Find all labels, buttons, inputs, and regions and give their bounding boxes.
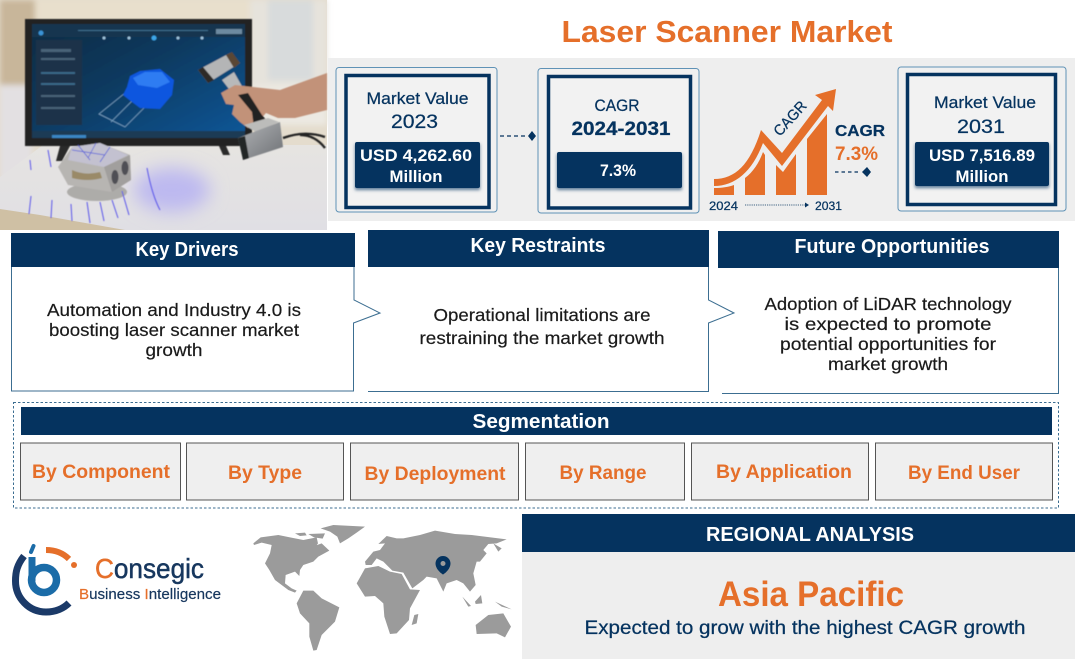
segment: by type: By Type <box>228 462 302 484</box>
panel: regional analysis: Expected to grow with the highest CAGR growth <box>584 618 1026 639</box>
card: CAGR 2024-2031: 7.3% <box>600 161 636 180</box>
card: market value 2023: Market Value <box>366 89 468 108</box>
connector arrow 1 <box>500 131 536 141</box>
segment: by type <box>186 443 344 500</box>
photo: handheld laser scanner and monitor <box>0 0 327 230</box>
card: CAGR 2024-2031: 2024-2031 <box>572 119 671 140</box>
segmentation heading: Segmentation <box>472 411 610 433</box>
segment: by deployment: By Deployment <box>364 463 506 485</box>
chart: CAGR growth arrow: CAGR <box>835 123 885 140</box>
card: market value 2031: USD 7,516.89 <box>929 146 1035 165</box>
blue laser lines <box>29 150 160 223</box>
panel: regional analysis: Asia Pacific <box>718 575 904 614</box>
chart: CAGR growth arrow: 2024 <box>709 199 738 213</box>
panel: key drivers: growth <box>146 340 202 360</box>
card: market value 2031: 2031 <box>957 117 1005 138</box>
panel: key restraints: Key Restraints <box>470 235 606 257</box>
logo: Consegic Business Intelligence: Business Intelligence <box>79 586 221 603</box>
panel: regional analysis <box>522 514 1075 659</box>
segment: by application <box>692 443 868 500</box>
segment: by deployment <box>350 443 518 500</box>
segment: by range <box>526 443 684 500</box>
card: CAGR 2024-2031: CAGR <box>594 96 640 115</box>
panel: market statistics band <box>328 58 1075 221</box>
segment: by end user: By End User <box>908 462 1020 484</box>
segment: by component: By Component <box>32 461 170 483</box>
chart: CAGR growth arrow: 2031 <box>815 199 842 213</box>
card: market value 2023: Million <box>390 167 442 186</box>
card: market value 2031 <box>898 67 1066 211</box>
segment: by end user <box>876 443 1052 500</box>
card: CAGR 2024-2031 <box>538 68 699 213</box>
panel: key drivers: Automation and Industry 4.0 is <box>47 300 301 320</box>
panel: future opportunities: is expected to promote <box>784 314 992 334</box>
panel: key drivers <box>11 233 380 391</box>
scanner and hand <box>198 53 240 83</box>
card: market value 2023 <box>336 68 497 212</box>
segmentation heading <box>21 407 1052 435</box>
panel: regional analysis: REGIONAL ANALYSIS <box>706 523 914 546</box>
logo: Consegic Business Intelligence <box>16 546 221 612</box>
chart: CAGR growth arrow <box>709 89 885 213</box>
panel: key restraints: Operational limitations are <box>434 305 650 325</box>
panel: future opportunities: Future Opportunities <box>794 236 990 258</box>
card: market value 2031: Million <box>956 167 1008 186</box>
segment: by component <box>20 443 180 500</box>
segment: by application: By Application <box>716 461 852 483</box>
blue scan model <box>99 93 147 127</box>
map: world map with Asia pin <box>253 525 512 651</box>
logo: Consegic Business Intelligence: Consegic <box>95 553 204 584</box>
chart: CAGR growth arrow: CAGR <box>770 98 811 140</box>
panel: key drivers: Key Drivers <box>136 239 238 261</box>
panel: key restraints <box>368 230 734 392</box>
panel: key restraints: restraining the market growth <box>420 328 664 348</box>
panel: future opportunities: market growth <box>828 354 948 374</box>
panel: key drivers: boosting laser scanner market <box>49 320 299 340</box>
panel: future opportunities: Adoption of LiDAR technology <box>764 294 1012 314</box>
panel: segmentation <box>14 402 1058 508</box>
title: Laser Scanner Market <box>562 14 892 49</box>
card: market value 2031: Market Value <box>934 93 1036 112</box>
segment: by range: By Range <box>560 462 647 484</box>
panel: future opportunities <box>718 231 1059 394</box>
card: market value 2023: 2023 <box>391 112 438 133</box>
physical part on table <box>67 183 127 201</box>
chart: CAGR growth arrow: 7.3% <box>835 144 878 165</box>
monitor <box>25 19 252 146</box>
card: market value 2023: USD 4,262.60 <box>360 146 472 165</box>
panel: future opportunities: potential opportunities for <box>780 334 996 354</box>
